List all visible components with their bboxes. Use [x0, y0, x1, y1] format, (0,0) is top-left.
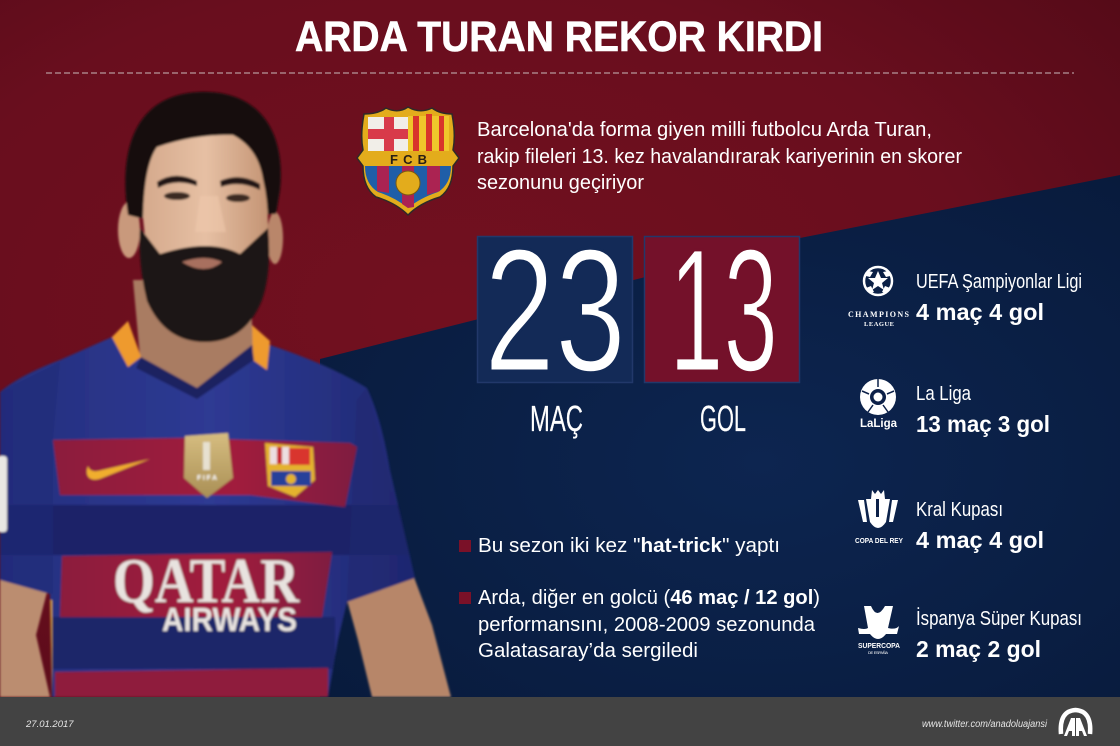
hair: [125, 92, 281, 218]
lips: [182, 258, 222, 269]
competition: La Liga: La Liga: [916, 382, 971, 405]
sponsor text: AIRWAYS: [162, 601, 297, 638]
beard: [140, 228, 269, 342]
collar: [112, 321, 141, 367]
intro text: sezonunu geçiriyor: [477, 171, 644, 194]
icon: champions league: CHAMPIONS: [848, 310, 910, 319]
icon: supercopa: SUPERCOPA: [858, 643, 900, 650]
ears: [118, 202, 140, 258]
icon: supercopa: [858, 606, 900, 655]
right arm: [347, 572, 451, 697]
stat: 23 matches: 23: [484, 213, 626, 409]
eyebrows: [157, 176, 260, 190]
intro text: Barcelona'da forma giyen milli futbolcu Arda Turan,: [477, 118, 932, 141]
icon: Anadolu Agency logo: [1061, 710, 1090, 736]
competition: Copa del Rey: 4 maç 4 gol: [916, 527, 1044, 553]
shirt: [0, 330, 420, 700]
footer: [0, 697, 1120, 746]
date: 27.01.2017: [25, 719, 74, 730]
bullet: previous best: Galatasaray’da sergiledi: [478, 639, 698, 662]
nike swoosh: [87, 459, 150, 480]
face: [143, 135, 268, 310]
background: navy diagonal: [320, 175, 1120, 697]
competition: Champions League: 4 maç 4 gol: [916, 299, 1044, 325]
player photo illustration: [0, 92, 451, 700]
title: ARDA TURAN REKOR KIRDI: [295, 13, 823, 61]
sponsor text: QATAR: [113, 546, 300, 616]
intro text: [477, 118, 962, 194]
shirt crest: [265, 443, 315, 497]
competition: Champions League: UEFA Şampiyonlar Ligi: [916, 270, 1082, 293]
eyes: [164, 192, 190, 200]
icon: la liga: [860, 379, 897, 430]
icon: champions league: [848, 267, 910, 328]
bullet: previous best: [459, 586, 820, 662]
bullet: previous best: Arda, diğer en golcü (46 maç / 12 gol): [478, 586, 820, 609]
stripe 1: [53, 438, 357, 507]
icon: copa del rey: COPA DEL REY: [855, 538, 903, 545]
bullet: hat-trick: Bu sezon iki kez "hat-trick" yaptı: [478, 534, 780, 557]
sponsor text: [113, 546, 300, 638]
fifa badge: FIFA: [197, 475, 217, 482]
icon: FC Barcelona crest: [357, 107, 459, 215]
icon: la liga: LaLiga: [860, 416, 897, 430]
competition: Supercopa: [858, 606, 1082, 662]
stripe 3: [55, 668, 328, 697]
competition: Supercopa: İspanya Süper Kupası: [916, 607, 1082, 630]
left arm: [0, 578, 50, 697]
icon: champions league: LEAGUE: [864, 321, 894, 328]
icon: supercopa: DE ESPAÑA: [868, 650, 888, 655]
fifa badge: [184, 433, 233, 498]
neck: [133, 280, 253, 392]
icon: copa del rey: [855, 490, 903, 545]
competition: Champions League: [848, 267, 1082, 328]
competition: La Liga: [860, 379, 1050, 437]
stat: 23 matches: MAÇ: [530, 398, 583, 439]
competition: La Liga: 13 maç 3 gol: [916, 411, 1050, 437]
stat: 13 goals: 13: [669, 213, 778, 409]
icon: FC Barcelona crest: FCB: [390, 152, 427, 167]
nose: [195, 196, 226, 232]
competition: Supercopa: 2 maç 2 gol: [916, 636, 1041, 662]
bullet: previous best: performansını, 2008-2009 sezonunda: [478, 613, 816, 636]
neckline: [136, 345, 254, 399]
sleeve patch: [0, 456, 7, 532]
social link: www.twitter.com/anadoluajansi: [922, 719, 1048, 730]
competition: Copa del Rey: [855, 490, 1044, 553]
stat: 23 matches: [478, 213, 632, 439]
stripe 2: [60, 552, 332, 617]
stat: 13 goals: [644, 213, 800, 439]
stat: 13 goals: GOL: [700, 398, 746, 439]
intro text: rakip fileleri 13. kez havalandırarak kariyerinin en skorer: [477, 145, 962, 168]
competition: Copa del Rey: Kral Kupası: [916, 498, 1003, 521]
